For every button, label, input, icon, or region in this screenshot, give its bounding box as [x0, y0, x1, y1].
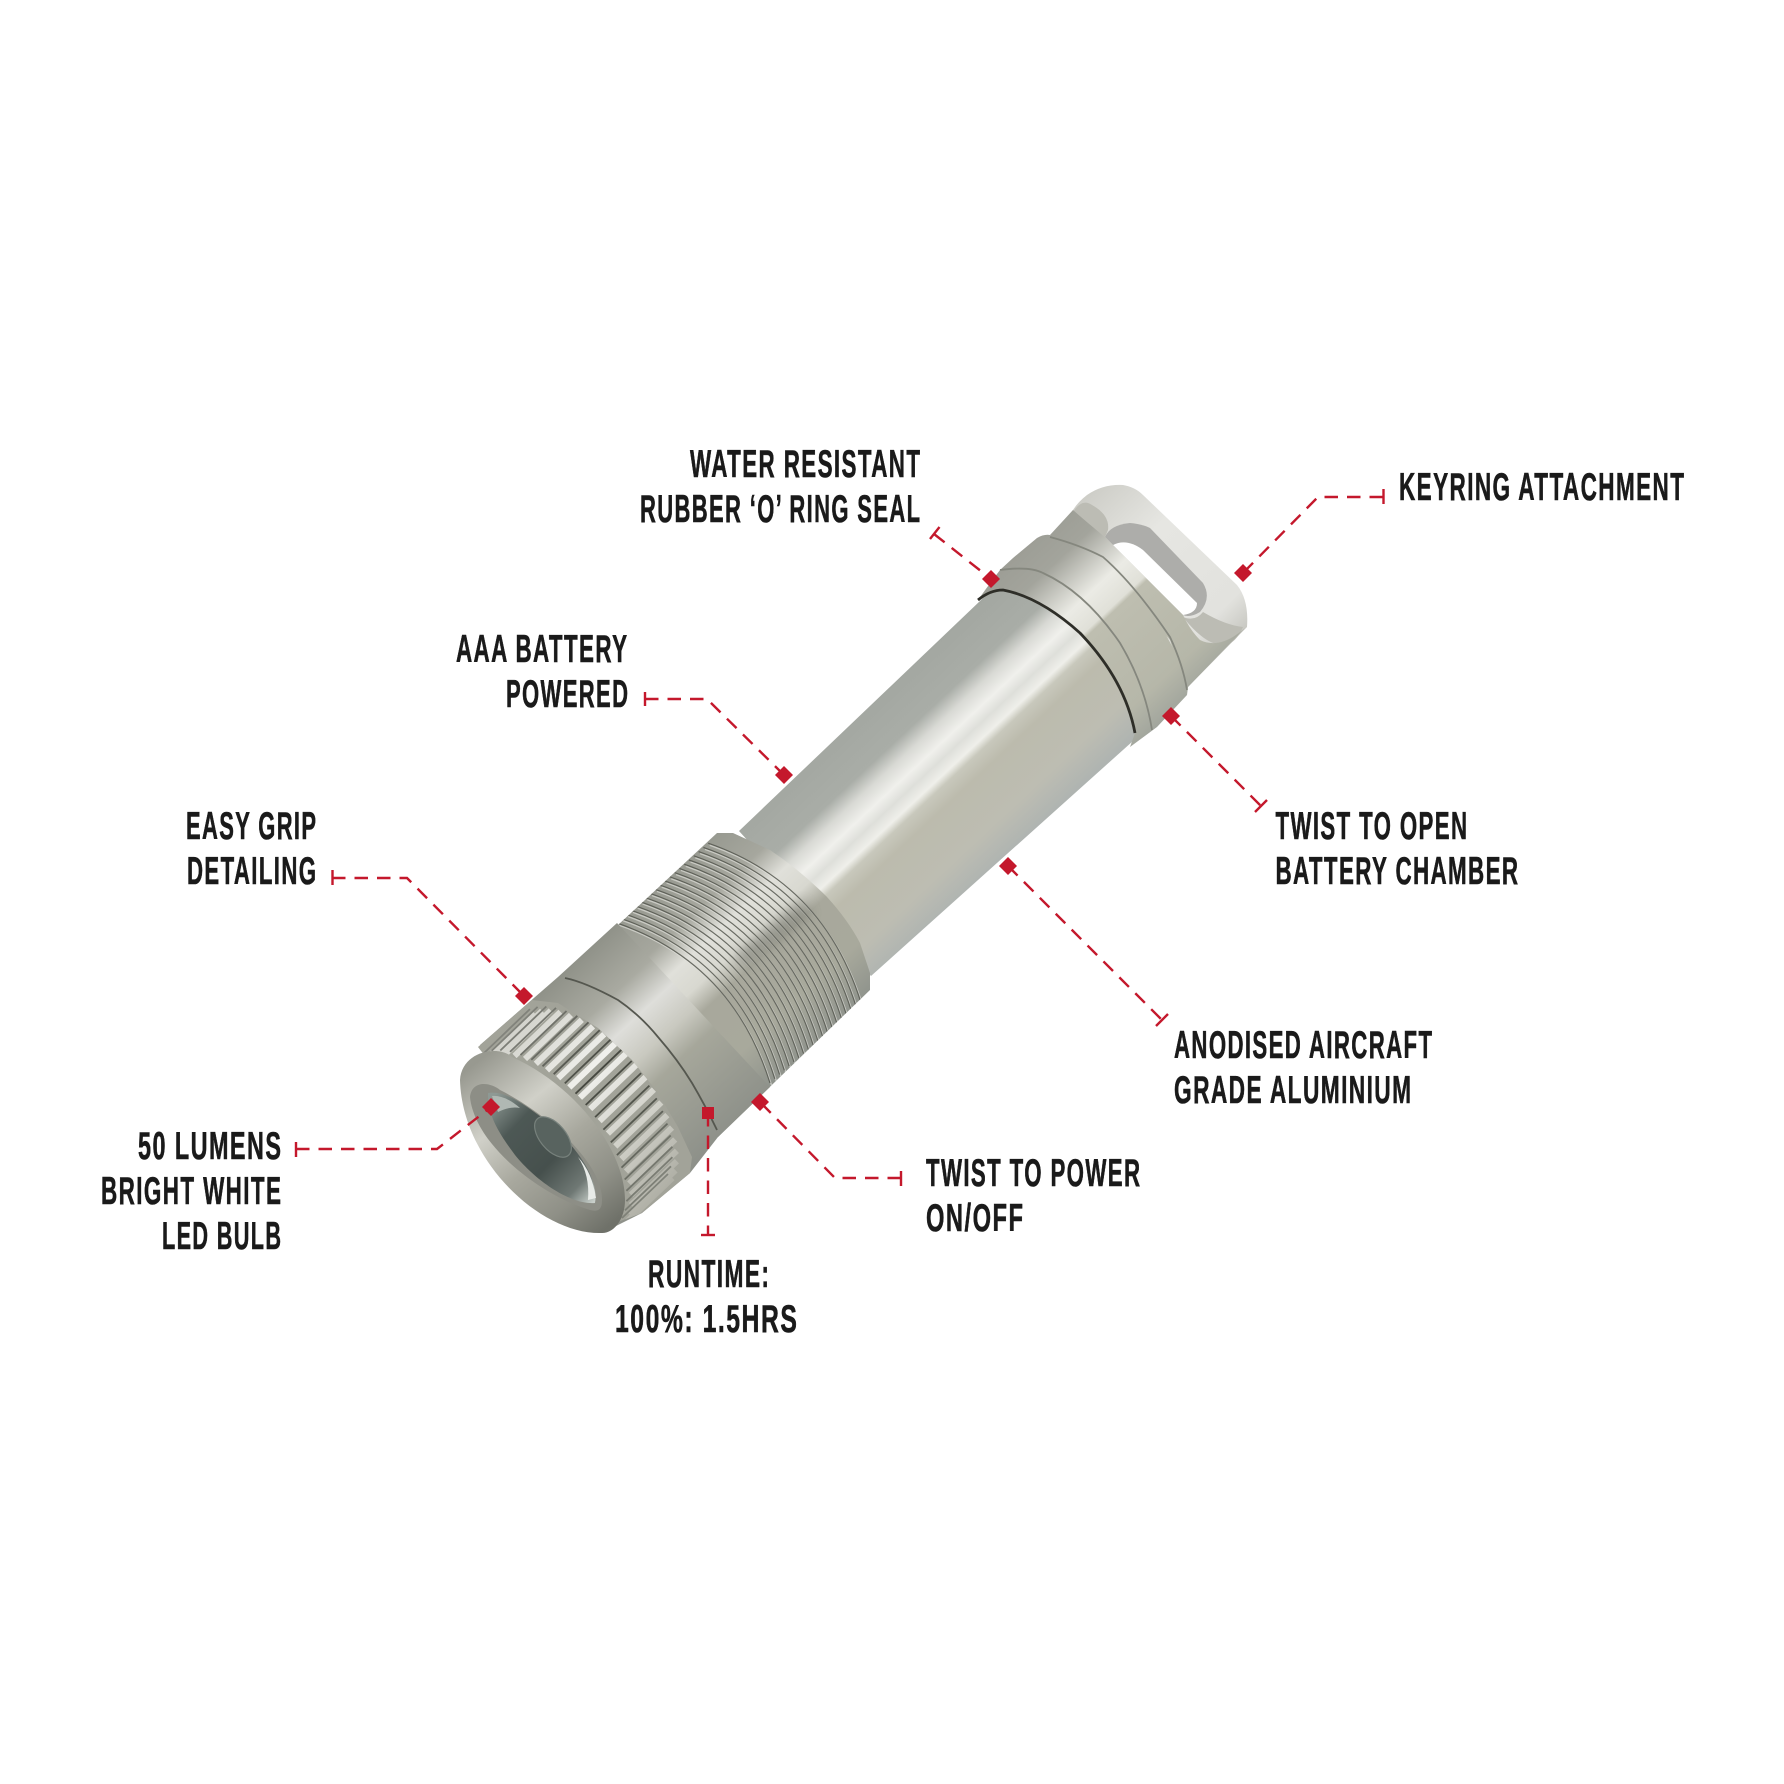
label: twist to power — [926, 1152, 1141, 1240]
label: anodised aluminium: GRADE ALUMINIUM — [1174, 1069, 1412, 1112]
label: runtime — [615, 1253, 798, 1341]
LED lens — [488, 1093, 596, 1203]
label: twist to open: BATTERY CHAMBER — [1276, 850, 1519, 893]
label: water resistant: WATER RESISTANT — [690, 443, 921, 486]
leader: keyring — [1234, 489, 1384, 582]
flashlight product image — [460, 485, 1247, 1233]
callout: anodised aluminium — [999, 857, 1433, 1112]
label: easy grip — [186, 805, 317, 893]
leader: twist to power — [751, 1093, 901, 1186]
label: 50 lumens: BRIGHT WHITE — [101, 1170, 282, 1213]
label: water resistant — [640, 443, 921, 531]
label: 50 lumens: LED BULB — [162, 1215, 282, 1258]
callout: 50 lumens — [101, 1098, 500, 1258]
label: runtime: 100%: 1.5HRS — [615, 1298, 798, 1341]
end cap with grooves — [978, 535, 1187, 747]
callout: keyring attachment — [1234, 466, 1685, 582]
leader: runtime — [701, 1107, 715, 1235]
callout: easy grip — [186, 805, 533, 1005]
callout: twist to power — [751, 1093, 1141, 1240]
head body and seam — [480, 923, 770, 1233]
leader: easy grip — [332, 870, 533, 1005]
keyring loop plate — [1050, 485, 1247, 687]
main battery tube — [739, 580, 1150, 976]
leader: 50 lumens — [296, 1098, 500, 1157]
leader: twist to open — [1162, 707, 1267, 812]
label: easy grip: EASY GRIP — [186, 805, 317, 848]
label: anodised aluminium: ANODISED AIRCRAFT — [1174, 1024, 1433, 1067]
callout: AAA battery — [456, 628, 793, 784]
knurled grip ring — [478, 1000, 692, 1223]
label: twist to power: TWIST TO POWER — [926, 1152, 1141, 1195]
label: runtime: RUNTIME: — [648, 1253, 770, 1296]
leader: anodised — [999, 857, 1168, 1026]
callout: runtime — [615, 1107, 798, 1341]
callout: water resistant seal — [640, 443, 1000, 588]
label: twist to power: ON/OFF — [926, 1197, 1024, 1240]
label: AAA battery: POWERED — [506, 673, 629, 716]
label: water resistant: RUBBER ‘O’ RING SEAL — [640, 488, 921, 531]
label: anodised aluminium — [1174, 1024, 1433, 1112]
callout: twist to open — [1162, 707, 1519, 893]
label: easy grip: DETAILING — [187, 850, 317, 893]
label: twist to open — [1276, 805, 1519, 893]
leader: AAA battery — [645, 692, 793, 784]
leader: water resistant — [930, 527, 1000, 588]
label: twist to open: TWIST TO OPEN — [1276, 805, 1468, 848]
label: 50 lumens — [101, 1125, 282, 1258]
front rim — [460, 1051, 625, 1233]
label: 50 lumens: 50 LUMENS — [138, 1125, 282, 1168]
rubber o-ring seal — [978, 590, 1135, 733]
label: AAA battery: AAA BATTERY — [456, 628, 628, 671]
cap neck below the plate — [1050, 510, 1245, 695]
label: AAA battery — [456, 628, 629, 716]
threaded grip section — [618, 833, 870, 1137]
